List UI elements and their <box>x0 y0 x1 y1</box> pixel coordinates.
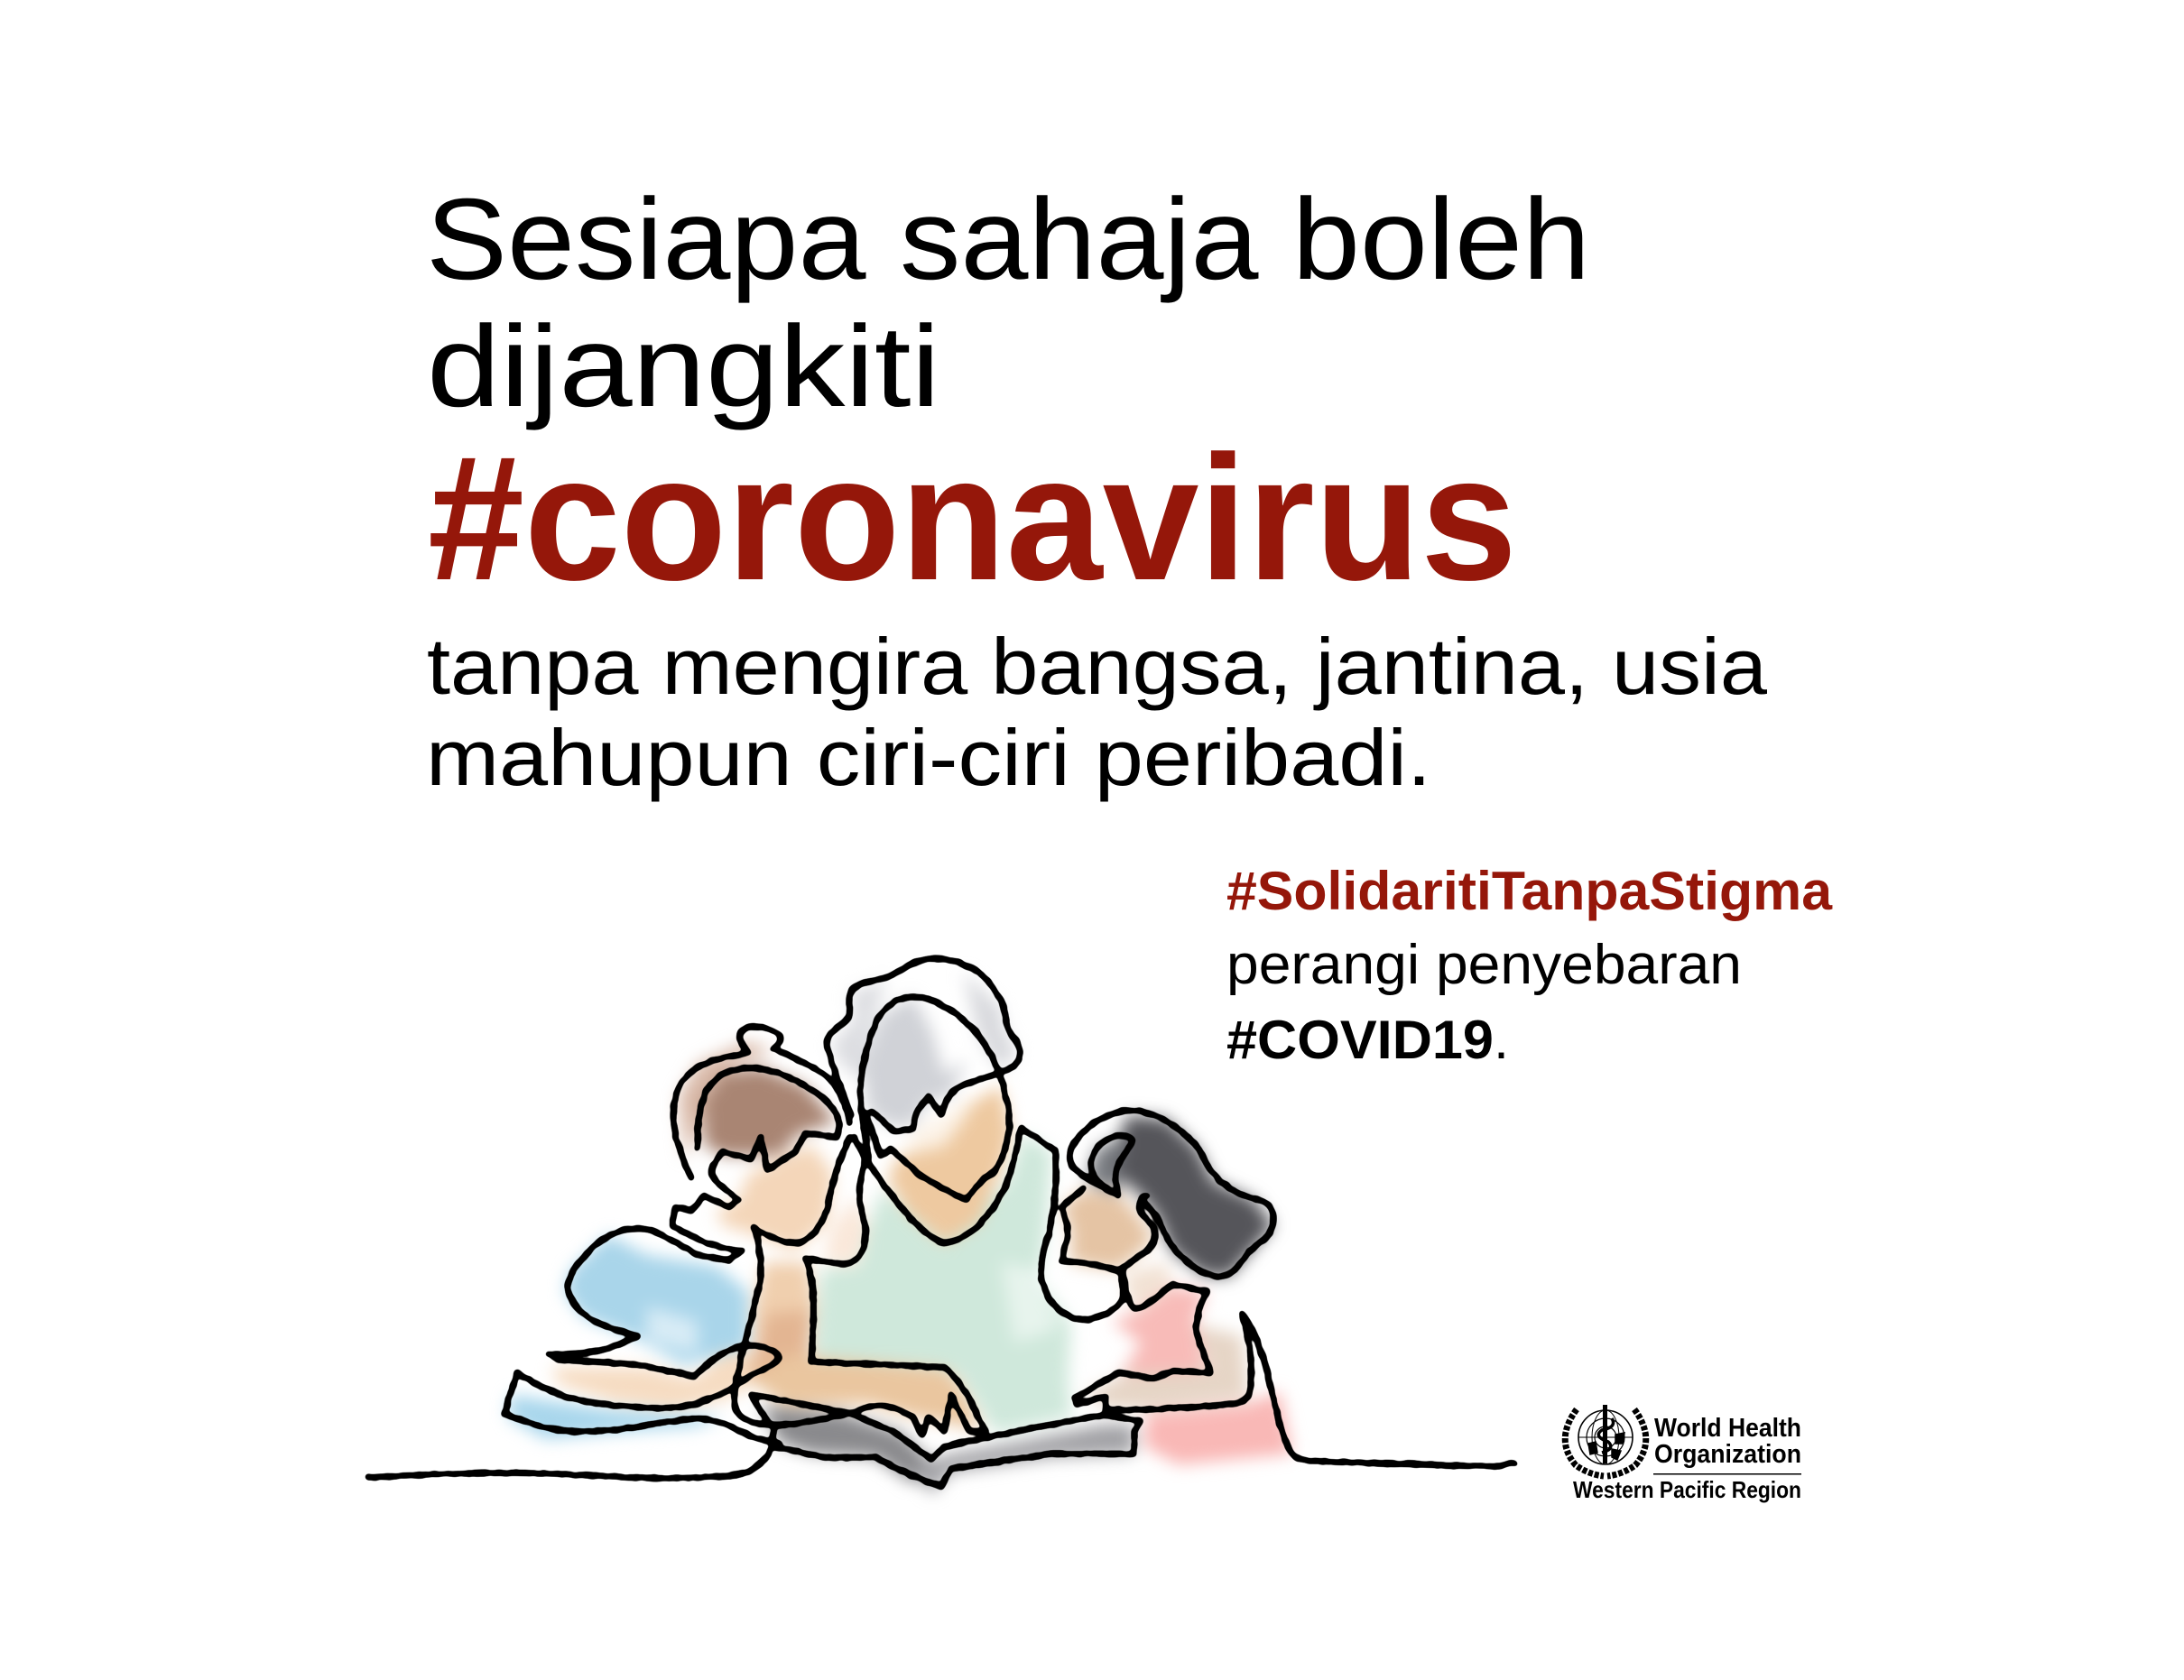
left ground line <box>368 1428 773 1479</box>
hashtag covid19: #COVID19. <box>1226 1010 1509 1070</box>
adult hair outline <box>828 958 1020 1131</box>
adult vest neckline <box>855 1128 1021 1242</box>
girl dress, arm and right-hand line <box>1074 1269 1514 1466</box>
illustration: three people reading a book <box>368 958 1514 1494</box>
icon: WHO emblem <box>1565 1405 1646 1476</box>
hashtag coronavirus: #coronavirus <box>428 419 1517 617</box>
adult arm and hand <box>751 1159 986 1435</box>
solidarity message <box>1226 861 1833 1070</box>
subheading <box>426 622 1767 802</box>
message line: perangi penyebaran <box>1226 934 1742 996</box>
headline line 2: dijangkiti <box>427 302 940 431</box>
logo text: Western Pacific Region <box>1573 1476 1801 1503</box>
child neck and back <box>735 1137 849 1425</box>
child face and blue shirt <box>504 1068 839 1445</box>
book <box>773 1413 1141 1487</box>
logo text: World Health <box>1654 1414 1801 1443</box>
headline line 1: Sesiapa sahaja boleh <box>426 175 1590 304</box>
subheading line 1: tanpa mengira bangsa, jantina, usia <box>427 622 1767 711</box>
girl hair <box>1069 1111 1273 1277</box>
logo: World Health Organization Western Pacific Region <box>1565 1405 1801 1503</box>
watercolour fills <box>507 972 1292 1494</box>
hashtag solidarity: #SolidaritiTanpaStigma <box>1226 861 1833 921</box>
logo text: Organization <box>1654 1440 1801 1469</box>
headline <box>426 175 1590 617</box>
girl face <box>1061 1188 1155 1271</box>
adult vest right side <box>1021 1128 1124 1320</box>
adult face and inner hair <box>860 997 1009 1200</box>
logo text <box>1573 1414 1801 1503</box>
child hair <box>673 1027 849 1177</box>
continuous ink line drawing <box>368 958 1514 1487</box>
girl hair band <box>1091 1135 1132 1196</box>
subheading line 2: mahupun ciri-ciri peribadi. <box>426 713 1431 802</box>
